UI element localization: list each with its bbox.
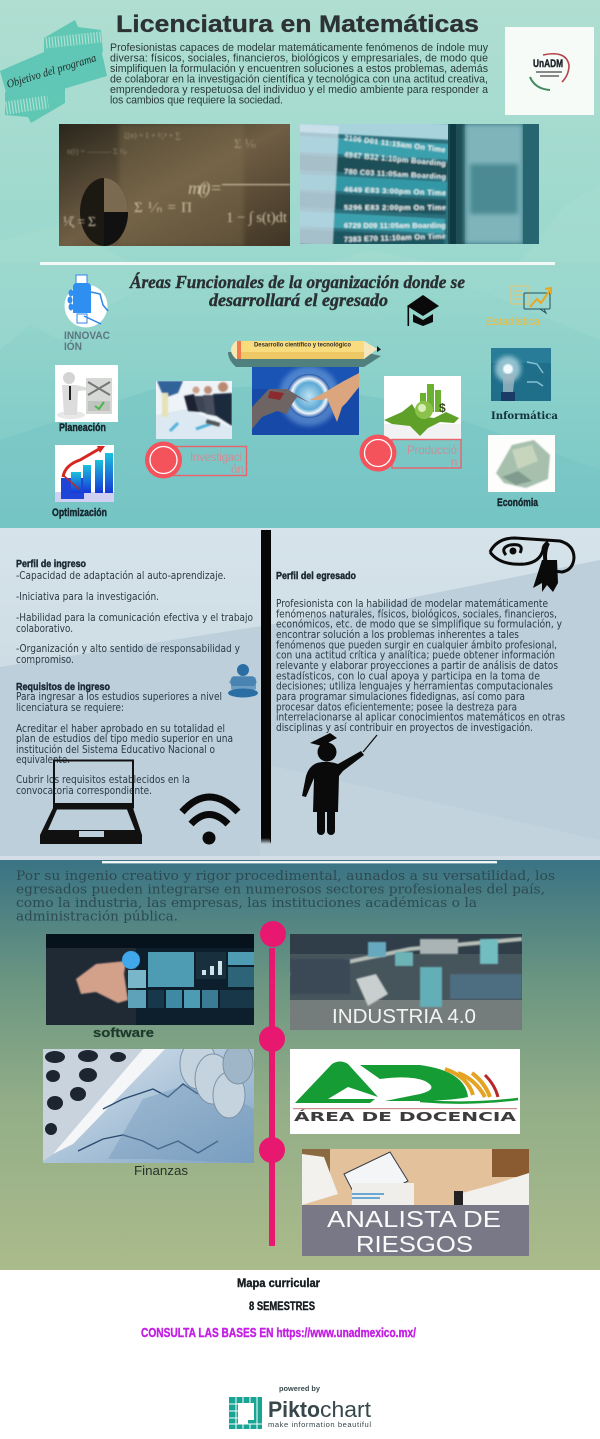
icon: diploma scroll — [490, 538, 574, 592]
pencil banner: desarrollo científico y tecnológico: Desarrollo científico y tecnológico — [254, 342, 351, 348]
photo: departure board: 4649 E83 3:00pm On Time — [344, 185, 446, 198]
text: perfil del egresado: fenómenos naturales, físicos, biológicos, sociales, financieros, — [276, 608, 557, 620]
pencil banner: desarrollo científico y tecnológico — [228, 341, 381, 367]
image: analista de riesgos: ANALISTA DE — [327, 1206, 501, 1232]
image: software — [46, 934, 254, 1025]
text: perfil del egresado: encontrar solución a los problemas inherentes a tales — [276, 629, 519, 641]
text: perfil de ingreso: -Capacidad de adaptación al auto-aprendizaje. — [16, 570, 226, 582]
text: sectores profesionales: Por su ingenio creativo y rigor procedimental, aunados a su versatilidad, los — [16, 869, 555, 884]
icon: graduation cap — [407, 295, 439, 326]
photo: math formulas: m(t) = — [188, 178, 222, 199]
photo: departure board: 780 C03 11:05am Boarding — [344, 167, 447, 181]
image: área de docencia — [290, 1049, 520, 1134]
section: sectors background — [0, 860, 600, 1270]
piktochart credit: Pikto — [268, 1397, 320, 1422]
piktochart credit: make information beautiful — [268, 1420, 371, 1429]
text: requisitos de ingreso: convocatoria correspondiente. — [16, 785, 152, 797]
image: analista de riesgos: RIESGOS — [356, 1231, 473, 1257]
logo: UnADM: UnADM — [533, 58, 563, 70]
text: perfil de ingreso: colaborativo. — [16, 623, 73, 635]
text: perfil de ingreso: -Habilidad para la comunicación efectiva y el trabajo — [16, 612, 253, 624]
text: requisitos de ingreso — [16, 681, 233, 797]
callout: producción: Producció — [407, 445, 457, 457]
text: perfil del egresado: Profesionista con la habilidad de modelar matemáticamente — [276, 598, 548, 610]
image: planeación — [55, 365, 118, 422]
label: económia: Económia — [497, 497, 539, 509]
text: requisitos de ingreso: Acreditar el haber aprobado en su totalidad el — [16, 723, 225, 735]
heading: áreas funcionales — [129, 271, 465, 310]
text: perfil de ingreso — [16, 558, 253, 666]
ribbon: Objetivo del programa — [0, 20, 107, 123]
text: requisitos de ingreso: equivalente. — [16, 754, 70, 766]
text: perfil del egresado: relevante y elaborar proyecciones a partir de análisis de datos — [276, 660, 558, 672]
piktochart credit — [229, 1384, 371, 1429]
photo: departure board — [300, 124, 539, 244]
label: software: software — [93, 1025, 154, 1040]
photo: math formulas: 1 − ∫ s(t)dt — [226, 210, 288, 226]
divider — [40, 262, 555, 265]
image: business team — [156, 381, 232, 439]
image: finanzas — [43, 1049, 254, 1163]
text: perfil del egresado: con una actitud crítica y analítica; puede obtener información — [276, 650, 555, 662]
section: profiles background — [0, 528, 600, 860]
image: industria 4.0 — [290, 934, 522, 1030]
text: perfil del egresado: económicos, etc. de modo que se simplifique su formulación, y — [276, 619, 562, 631]
text: perfil del egresado: para programar simulaciones fidedignas, así como para — [276, 691, 525, 703]
logo: UnADM — [505, 27, 594, 115]
image: informática — [491, 348, 551, 401]
piktochart credit: powered by — [279, 1384, 321, 1393]
label: optimización: Optimización — [52, 507, 107, 519]
photo: departure board: 4947 B32 1:10pm Boarding — [344, 150, 447, 168]
program description: de colaborar en la investigación científica y tecnológica con una actitud creativa, — [110, 74, 488, 86]
callout: producción — [360, 434, 461, 472]
image: analista de riesgos — [302, 1149, 529, 1257]
program description: emprendedora y respetuosa del individuo y el medio ambiente para responder a — [110, 84, 488, 96]
photo: math formulas: n(t) = ——— Σ ¹⁄ₚ — [67, 147, 127, 156]
text: requisitos de ingreso: licenciatura se requiere: — [16, 702, 124, 714]
photo: math formulas — [59, 124, 290, 246]
callout: producción: n — [451, 457, 457, 469]
section: program background — [0, 0, 600, 528]
icon: estadística chart — [511, 286, 551, 313]
footer: consulta las bases: CONSULTA LAS BASES EN https://www.unadmexico.mx/ — [141, 1326, 416, 1340]
image: green finance arrow — [384, 376, 461, 439]
image: robot and human hand — [252, 367, 359, 435]
vertical divider bar — [261, 530, 271, 844]
piktochart credit: chart — [320, 1397, 371, 1422]
text: perfil de ingreso: -Organización y alto sentido de responsabilidad y — [16, 643, 240, 655]
label: informática: Informática — [491, 411, 559, 422]
text: perfil del egresado: procesar datos eficientemente; posee la destreza para — [276, 701, 517, 713]
text: perfil del egresado: decisiones; utiliza lenguajes y herramientas computacionales — [276, 681, 553, 693]
text: perfil de ingreso: Perfil de ingreso — [16, 558, 86, 570]
text: sectores profesionales: como la industria, las empresas, las instituciones académicas o la — [16, 896, 477, 911]
program description: simplifiquen la formulación y encuentren soluciones a estos problemas, además — [110, 63, 488, 75]
photo: departure board: 6729 D09 11:05am Boarding — [344, 221, 446, 230]
program description: Profesionistas capaces de modelar matemáticamente fenómenos de índole muy — [110, 42, 489, 54]
heading: áreas funcionales: desarrollará el egresado — [209, 290, 388, 310]
text: perfil del egresado: fenómenos que pueden surgir en cualquier ámbito profesional, — [276, 639, 557, 651]
photo: departure board: 2106 D01 11:15am On Time — [344, 133, 446, 154]
text: sectores profesionales: administración pública. — [16, 910, 178, 924]
text: requisitos de ingreso: Cubrir los requisitos establecidos en la — [16, 774, 190, 786]
program description: los cambios que requiere la sociedad. — [110, 94, 283, 106]
text: requisitos de ingreso: plan de estudios del tipo medio superior en una — [16, 733, 233, 745]
photo: departure board: 5296 E83 2:00pm On Time — [344, 203, 446, 212]
divider — [102, 861, 497, 863]
icon: person with laptop — [228, 664, 258, 698]
text: perfil del egresado: Perfil del egresado — [276, 570, 356, 582]
icon: innovation device — [64, 275, 108, 328]
text: perfil del egresado: estadísticos, con lo cual apoya y participa en la toma de — [276, 670, 540, 682]
timeline — [259, 921, 286, 1246]
label: estadística: Estadística — [486, 316, 541, 328]
label: innovación: INNOVAC — [64, 330, 110, 342]
text: perfil de ingreso: compromiso. — [16, 654, 74, 666]
label: finanzas: Finanzas — [134, 1163, 189, 1178]
callout: investigación — [145, 442, 246, 478]
text: requisitos de ingreso: institución del Sistema Educativo Nacional o — [16, 744, 215, 756]
text: perfil de ingreso: -Iniciativa para la investigación. — [16, 591, 159, 603]
photo: math formulas: Σ ¹⁄ₙ — [234, 136, 256, 151]
icon: graduate teacher — [302, 733, 377, 835]
photo: math formulas: Σ ¹⁄ₙ = Π — [134, 200, 192, 216]
text: perfil del egresado — [276, 570, 565, 734]
image: economía banknotes — [488, 435, 555, 492]
image: industria 4.0: INDUSTRIA 4.0 — [332, 1006, 476, 1028]
image: green finance arrow: $ — [439, 401, 446, 415]
text: sectores profesionales — [16, 869, 555, 924]
image: optimización — [55, 445, 114, 502]
text: perfil del egresado: disciplinas y así contribuir en proyectos de investigación. — [276, 722, 533, 734]
photo: math formulas: ¹⁄ζ = Σ — [63, 215, 96, 230]
ribbon: Objetivo del programa: Objetivo del programa — [5, 52, 98, 91]
callout: investigación: ón — [231, 464, 244, 476]
footer: 8 semestres: 8 SEMESTRES — [249, 1299, 315, 1313]
image: área de docencia: ÁREA DE DOCENCIA — [294, 1109, 517, 1124]
label: planeación: Planeación — [59, 422, 106, 434]
label: innovación — [64, 330, 110, 353]
photo: departure board: 7383 E70 11:10am On Time — [344, 231, 446, 244]
icon: wifi — [182, 797, 238, 844]
callout: investigación: Investigaci — [190, 452, 242, 464]
label: innovación: IÓN — [64, 340, 82, 353]
text: requisitos de ingreso: Para ingresar a los estudios superiores a nivel — [16, 691, 222, 703]
heading: áreas funcionales: Áreas Funcionales de la organización donde se — [129, 271, 465, 292]
icon: laptop — [40, 760, 142, 844]
program description: diversa: físicos, sociales, financieros, biológicos y empresariales, de modo que — [110, 52, 488, 64]
text: sectores profesionales: egresados pueden integrarse en numerosos sectores profesionales del país, — [16, 882, 545, 898]
program description — [110, 42, 489, 106]
text: requisitos de ingreso: Requisitos de ingreso — [16, 681, 110, 693]
title: Licenciatura en Matemáticas — [116, 11, 479, 38]
footer: mapa curricular: Mapa curricular — [237, 1276, 320, 1290]
photo: math formulas: ζ(n) = 1 + ¹⁄₂ⁿ + ∑ — [124, 131, 181, 140]
